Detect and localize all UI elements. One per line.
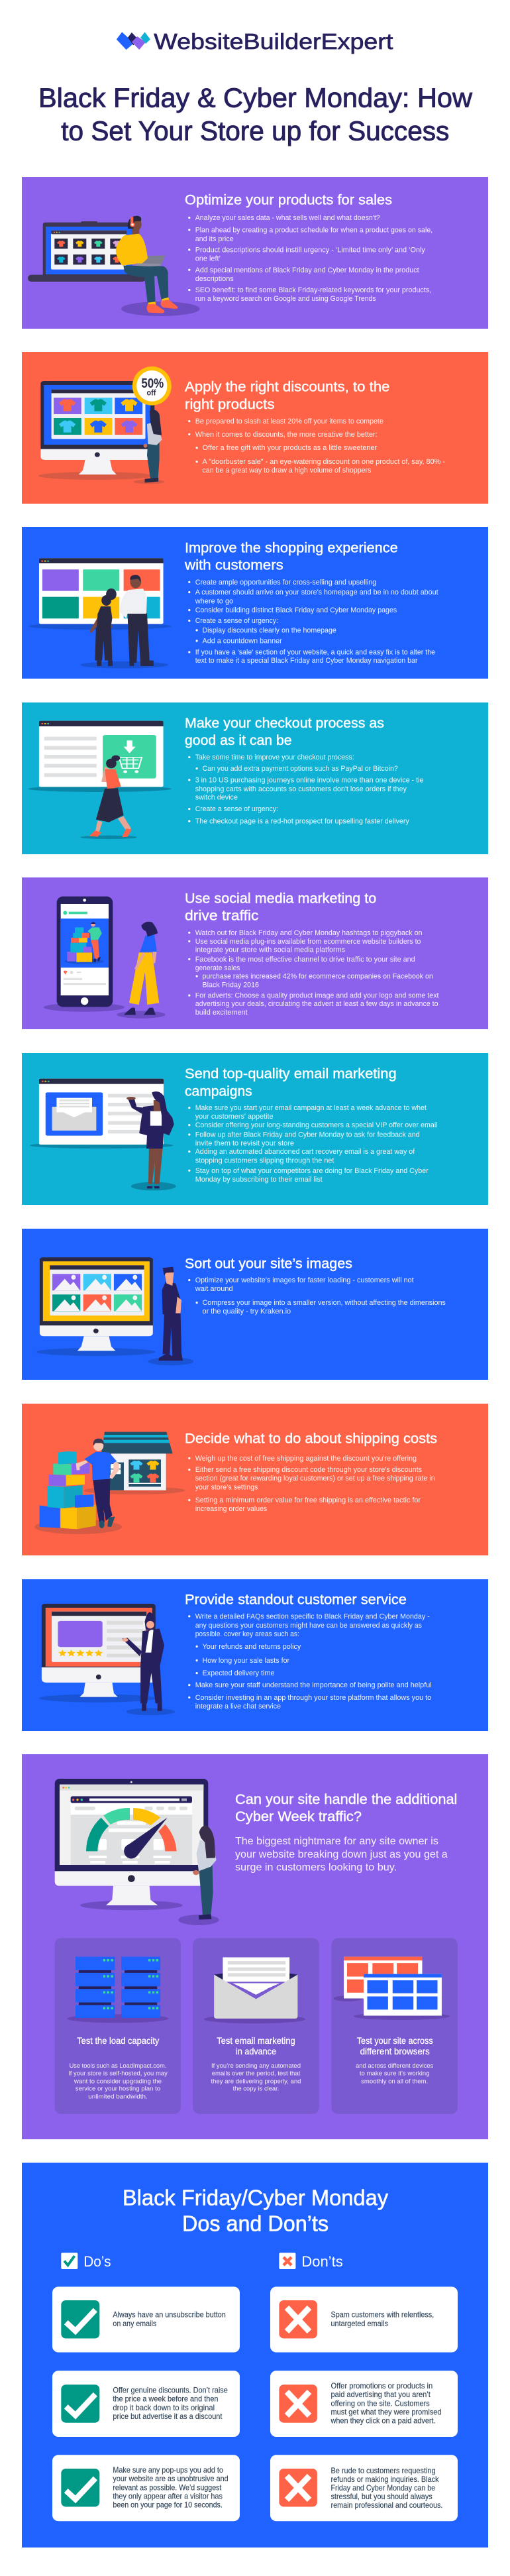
heading	[185, 379, 389, 412]
card text	[68, 2062, 168, 2100]
don't card: spam	[270, 2286, 458, 2353]
bullet list	[188, 1104, 438, 1184]
do's column header: Do’s	[83, 2253, 111, 2270]
bullet list: one left’	[195, 254, 221, 262]
bullet list: Plan ahead by creating a product schedule for when a product goes on sale,	[195, 227, 433, 235]
title: Black Friday & Cyber Monday: How	[38, 83, 472, 113]
heading: Sort out your site’s images	[185, 1257, 352, 1272]
heading	[185, 716, 384, 748]
icon: check	[61, 2469, 99, 2506]
card text: Use tools such as LoadImpact.com.	[70, 2062, 166, 2070]
panel: improve the shopping experience	[22, 527, 488, 679]
card text: refunds or making inquiries. Black	[331, 2475, 439, 2484]
bullet list: your customers' appetite	[195, 1113, 274, 1121]
bullet list: Display discounts clearly on the homepage	[203, 627, 336, 635]
card text: drop it back down to its original	[113, 2404, 215, 2412]
card heading: Test email marketing	[217, 2035, 295, 2046]
bullet list: wait around	[195, 1285, 233, 1293]
bullet list: Watch out for Black Friday and Cyber Monday hashtags to piggyback on	[195, 929, 423, 937]
icon: check	[61, 2300, 99, 2338]
card text: If your store is self-hosted, you may	[68, 2070, 168, 2078]
bullet list: Can you add extra payment options such as PayPal or Bitcoin?	[203, 765, 398, 773]
icon: envelope	[204, 1957, 305, 2023]
heading: Use social media marketing to	[185, 891, 376, 906]
heading: Make your checkout process as	[185, 716, 384, 731]
illustration: businesswoman presenting email window	[30, 1079, 176, 1190]
bullet list: Weigh up the cost of free shipping against the discount you're offering	[195, 1455, 417, 1463]
bullet list: where to go	[195, 598, 233, 606]
card text: want to consider upgrading the	[74, 2078, 162, 2085]
bullet list: or the quality - try Kraken.io	[203, 1308, 291, 1316]
do card: genuine discounts	[52, 2371, 240, 2437]
bullet list: A customer should arrive on your store's homepage and be in no doubt about	[195, 588, 438, 596]
card text: the copy is clear.	[233, 2086, 279, 2093]
panel: dos and don'ts	[22, 2163, 488, 2548]
bullet list: A "doorbuster sale" - an eye-watering discount on one product of, say, 80% -	[203, 458, 445, 466]
heading: Black Friday/Cyber Monday	[123, 2186, 389, 2210]
bullet list: can be a great way to draw a high volume of shoppers	[203, 467, 372, 475]
heading	[123, 2186, 389, 2236]
bullet list	[188, 1455, 435, 1513]
card heading	[357, 2035, 433, 2056]
heading: campaigns	[185, 1084, 252, 1099]
bullet list: any questions your customers might have can be answered as quickly as	[195, 1622, 422, 1630]
card text: when they click on a paid advert.	[331, 2417, 436, 2426]
bullet list: Black Friday 2016	[203, 981, 259, 989]
bullet list: possible. cover key areas such as:	[195, 1630, 299, 1638]
heading: Send top-quality email marketing	[185, 1066, 397, 1082]
bullet list: Consider offering your long-standing customers a special VIP offer over email	[195, 1121, 438, 1129]
bullet list: text to make it a special Black Friday and Cyber Monday navigation bar	[195, 657, 418, 665]
card text: they are delivering properly, and	[211, 2078, 301, 2085]
card text: on any emails	[113, 2320, 156, 2328]
bullet list: Make sure your staff understand the importance of being polite and helpful	[195, 1681, 432, 1689]
bullet list: increasing order values	[195, 1505, 267, 1513]
card text	[113, 2311, 226, 2328]
bullet list: switch device	[195, 794, 238, 802]
heading	[185, 891, 376, 924]
card text: Be rude to customers requesting	[331, 2467, 436, 2475]
intro text	[235, 1836, 448, 1874]
bullet list	[188, 214, 433, 303]
do card: pop-ups	[52, 2455, 240, 2521]
icon: cross	[279, 2300, 317, 2338]
card text: relevant as possible. We’d suggest	[113, 2483, 222, 2492]
do's column header	[61, 2253, 111, 2270]
bullet list: section (great for rewarding loyal customers) or set up a free shipping rate in	[195, 1475, 435, 1483]
bullet list: Facebook is the most effective channel to drive traffic to your site and	[195, 956, 415, 964]
heading: Optimize your products for sales	[185, 192, 392, 207]
panel: shipping costs	[22, 1404, 488, 1555]
bullet list: If you have a 'sale' section of your website, a quick and easy fix is to alter the	[195, 648, 435, 656]
panel: make your checkout process good	[22, 702, 488, 854]
heading: good as it can be	[185, 733, 292, 748]
bullet list: invite them to revisit your store	[195, 1140, 294, 1148]
bullet list: Create a sense of urgency:	[195, 617, 278, 625]
panel: apply the right discounts	[22, 352, 488, 504]
bullet list: Offer a free gift with your products as a little sweetener	[203, 444, 377, 452]
bullet list: Consider building distinct Black Friday and Cyber Monday pages	[195, 606, 397, 614]
bullet list	[188, 579, 438, 665]
bullet list: Add a countdown banner	[203, 638, 282, 645]
bullet list	[188, 1276, 446, 1316]
logo: WebsiteBuilderExpert	[154, 29, 393, 54]
heading: Improve the shopping experience	[185, 541, 398, 556]
bullet list: Create ample opportunities for cross-selling and upselling	[195, 579, 376, 587]
badge label	[141, 376, 164, 398]
heading: Provide standout customer service	[185, 1592, 407, 1607]
bullet list: purchase rates increased 42% for ecommerce companies on Facebook on	[203, 973, 433, 981]
bullet list: The checkout page is a red-hot prospect for upselling faster delivery	[195, 818, 409, 826]
card heading	[217, 2035, 295, 2056]
bullet list: Compress your image into a smaller version, without affecting the dimensions	[203, 1299, 446, 1307]
card text: and across different devices	[356, 2062, 434, 2070]
title: to Set Your Store up for Success	[61, 116, 449, 146]
bullet list: shopping carts with accounts so customers don't lose orders if they	[195, 785, 407, 793]
panel: cyber week traffic	[22, 1754, 488, 2139]
title	[38, 83, 472, 146]
bullet list: Setting a minimum order value for free shipping is an effective tactic for	[195, 1496, 421, 1504]
illustration: woman walking past checkout page	[28, 721, 172, 839]
bullet list: generate sales	[195, 964, 240, 972]
card text: the price a week before and then	[113, 2395, 219, 2404]
don'ts column header: Don’ts	[301, 2253, 343, 2270]
bullet list	[188, 1612, 432, 1710]
card text: Offer genuine discounts. Don’t raise	[113, 2386, 228, 2395]
heading: Can your site handle the additional	[235, 1792, 457, 1807]
bullet list: run a keyword search on Google and using Google Trends	[195, 295, 376, 303]
bullet list: Your refunds and returns policy	[203, 1643, 301, 1651]
heading: with customers	[184, 558, 283, 573]
heading: Dos and Don’ts	[182, 2212, 329, 2236]
icon: cross	[279, 2384, 317, 2423]
card text: been on your page for 10 seconds.	[113, 2500, 223, 2509]
bullet list: Use social media plug-ins available from ecommerce website builders to	[195, 938, 421, 946]
panel: optimize your products for sales	[22, 177, 488, 329]
bullet list: Monday by subscribing to their email list	[195, 1176, 323, 1184]
card text	[331, 2382, 441, 2426]
card text	[113, 2466, 229, 2509]
bullet list: and its price	[195, 235, 234, 243]
icon: overlapping browser windows	[333, 1957, 450, 2020]
bullet list: Stay on top of what your competitors are doing for Black Friday and Cyber	[195, 1167, 429, 1175]
card text: Always have an unsubscribe button	[113, 2311, 226, 2320]
icon: check	[61, 2384, 99, 2423]
bullet list: advertising your deals, circulating the advert at least a few days in advance to	[195, 1000, 438, 1008]
card text: If you’re sending any automated	[211, 2062, 301, 2070]
icon: cross	[279, 2469, 317, 2506]
card text: must get what they were promised	[331, 2408, 441, 2416]
bullet list: Either send a free shipping discount code through your store's discounts	[195, 1466, 422, 1474]
bullet list: Consider investing in an app through your store platform that allows you to	[195, 1694, 431, 1702]
card text	[331, 2311, 434, 2328]
panel: social media marketing	[22, 877, 488, 1029]
bullet list: SEO benefit: to find some Black Friday-related keywords for your products,	[195, 286, 431, 294]
panel: sort out your site's images	[22, 1229, 488, 1380]
icon: server racks	[67, 1957, 168, 2023]
bullet list: integrate a live chat service	[195, 1703, 281, 1710]
heading	[185, 1066, 397, 1099]
bullet list: Add special mentions of Black Friday and Cyber Monday in the product	[195, 266, 419, 274]
panel: customer service	[22, 1579, 488, 1731]
bullet list: Write a detailed FAQs section specific to Black Friday and Cyber Monday -	[195, 1612, 430, 1620]
bullet list: For adverts: Choose a quality product image and add your logo and some text	[195, 991, 439, 999]
card text: emails over the period, test that	[212, 2070, 301, 2078]
bullet list: Follow up after Black Friday and Cyber Monday to ask for feedback and	[195, 1131, 420, 1139]
intro text: surge in customers looking to buy.	[235, 1862, 397, 1874]
intro text: your website breaking down just as you get a	[235, 1849, 448, 1860]
bullet list	[188, 418, 445, 475]
illustration: monitor with speed gauge and woman	[55, 1779, 219, 1925]
bullet list: Create a sense of urgency:	[195, 805, 278, 813]
bullet list: Product descriptions should instill urgency - ‘Limited time only’ and ‘Only	[195, 247, 425, 254]
illustration: man leaning on stacked boxes by store	[34, 1432, 185, 1534]
card heading: in advance	[236, 2046, 276, 2056]
bullet list: Be prepared to slash at least 20% off your items to compete	[195, 418, 383, 425]
card: test across browsers	[331, 1938, 458, 2114]
illustration: woman presenting reviews on monitor	[39, 1604, 175, 1715]
card text: paid advertising that you aren’t	[331, 2390, 431, 2399]
don'ts column header	[279, 2253, 343, 2270]
bullet list: Analyze your sales data - what sells well and what doesn't?	[195, 214, 380, 222]
card text: smoothly on all of them.	[361, 2078, 428, 2085]
card heading: Test your site across	[357, 2035, 433, 2046]
bullet list: stopping customers slipping through the net	[195, 1157, 334, 1165]
bullet list: Adding an automated abandoned cart recovery email is a great way of	[195, 1148, 415, 1156]
card text: Friday and Cyber Monday can be	[331, 2484, 435, 2492]
do card: unsubscribe button	[52, 2286, 240, 2353]
don't card: rude	[270, 2455, 458, 2521]
card heading: Test the load capacity	[77, 2035, 159, 2046]
bullet list: your store's settings	[195, 1484, 258, 1492]
card text: stressful, but you should always	[331, 2492, 433, 2501]
card text	[113, 2386, 228, 2421]
card text	[356, 2062, 434, 2085]
heading: Cyber Week traffic?	[235, 1809, 362, 1824]
card text: Spam customers with relentless,	[331, 2311, 434, 2320]
bullet list	[188, 754, 424, 826]
panel: send email marketing campaigns	[22, 1053, 488, 1205]
card text: your website are as unobtrusive and	[113, 2475, 229, 2483]
don't card: promotions	[270, 2371, 458, 2437]
card text: Make sure any pop-ups you add to	[113, 2466, 223, 2475]
card text: service or your hosting plan to	[76, 2086, 160, 2093]
heading	[184, 541, 398, 573]
card text: Offer promotions or products in	[331, 2382, 433, 2390]
heading: Apply the right discounts, to the	[185, 379, 389, 394]
heading: drive traffic	[185, 909, 258, 924]
bullet list: integrate your store with social media platforms	[195, 946, 345, 954]
bullet list: Optimize your website's images for faster loading - customers will not	[195, 1276, 414, 1284]
intro text: The biggest nightmare for any site owner is	[235, 1836, 438, 1847]
bullet list: Make sure you start your email campaign at least a week advance to whet	[195, 1104, 427, 1112]
bullet list	[188, 929, 439, 1017]
badge label: off	[147, 388, 156, 398]
illustration: monitor with discounted tees and woman holding badge	[38, 366, 172, 484]
bullet list: How long your sale lasts for	[203, 1657, 289, 1665]
card: test email marketing	[193, 1938, 319, 2114]
bullet list: build excitement	[195, 1009, 248, 1017]
illustration: person with laptop in front of store screen	[28, 216, 200, 316]
bullet list: Take some time to improve your checkout process:	[195, 754, 354, 761]
bullet list: When it comes to discounts, the more creative the better:	[195, 431, 378, 439]
heading: right products	[185, 397, 274, 412]
bullet list: Expected delivery time	[203, 1669, 274, 1677]
card text	[331, 2467, 442, 2510]
illustration: couple viewing a store page	[28, 558, 172, 669]
illustration: man beside monitor with image gallery	[36, 1257, 193, 1365]
card text: remain professional and courteous.	[331, 2501, 442, 2510]
heading	[235, 1792, 457, 1824]
card heading: different browsers	[360, 2046, 430, 2056]
card text: offering on the site. Customers	[331, 2399, 430, 2408]
heading: Decide what to do about shipping costs	[185, 1431, 437, 1446]
illustration: woman looking at social post on phone	[44, 897, 166, 1019]
card text: to make sure it’s working	[360, 2070, 429, 2078]
bullet list: descriptions	[195, 275, 234, 283]
card text	[211, 2062, 301, 2093]
bullet list: 3 in 10 US purchasing journeys online involve more than one device - tie	[195, 777, 424, 785]
card text: untargeted emails	[331, 2320, 388, 2328]
card: test the load capacity	[54, 1938, 181, 2114]
badge label: 50%	[141, 376, 164, 391]
card text: unlimited bandwidth.	[88, 2093, 148, 2100]
card text: price but advertise it as a discount	[113, 2412, 223, 2421]
card text: they only appear after a visitor has	[113, 2492, 223, 2501]
